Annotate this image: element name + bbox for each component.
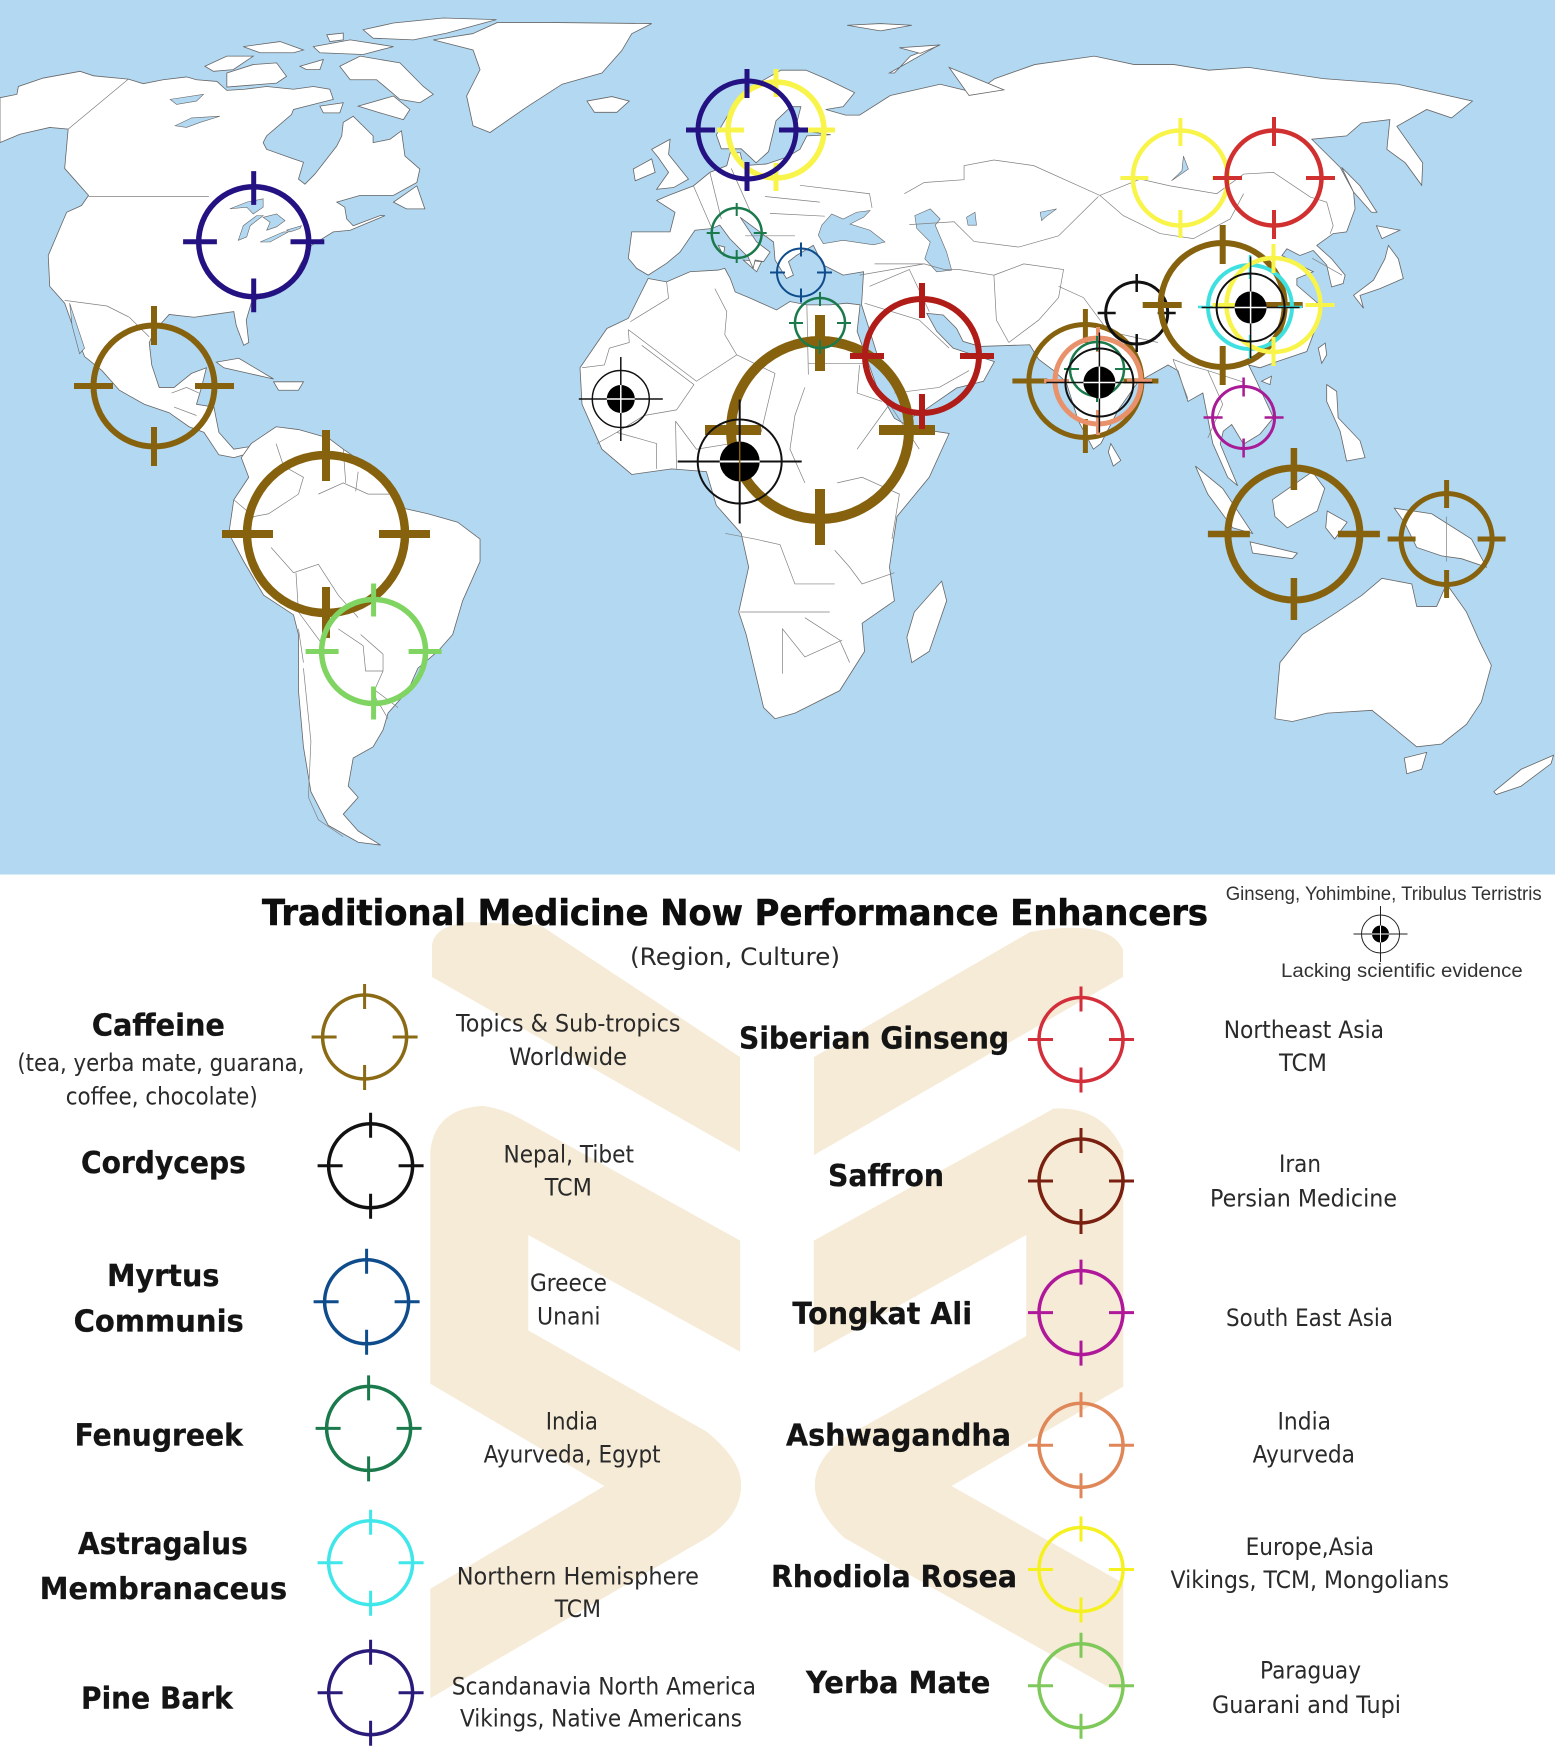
legend row: Yerba Mate: Paraguay	[1260, 1657, 1361, 1685]
legend row: Rhodiola Rosea: Vikings, TCM, Mongolians	[1170, 1566, 1449, 1594]
legend row: Ashwagandha: India	[1278, 1408, 1331, 1436]
reticle: Siberian Ginseng	[1213, 117, 1335, 239]
reticle: lacking evidence, Nigeria	[678, 400, 802, 524]
legend row: Astragalus Membranaceus: Membranaceus	[40, 1572, 287, 1607]
reticle: Yerba Mate, Paraguay	[306, 584, 442, 720]
legend row: Myrtus Communis: Myrtus	[107, 1259, 219, 1294]
legend row: Fenugreek: Fenugreek	[75, 1418, 244, 1453]
reticle: Caffeine, India	[1012, 309, 1158, 453]
legend row: Astragalus Membranaceus	[40, 1510, 699, 1623]
legend row: Tongkat Ali: South East Asia	[1226, 1304, 1393, 1332]
legend row: Cordyceps: TCM	[544, 1174, 592, 1202]
reticle: Fenugreek, Egypt	[789, 292, 851, 354]
legend row: Tongkat Ali: Tongkat Ali	[792, 1297, 972, 1332]
legend row: Ashwagandha	[786, 1392, 1355, 1498]
legend row: Caffeine: Caffeine	[92, 1008, 225, 1043]
reticle: Tongkat Ali, South East Asia	[1204, 378, 1284, 458]
legend row: Myrtus Communis: Communis	[74, 1305, 244, 1340]
legend row: Saffron: Saffron	[828, 1159, 944, 1194]
reticle: Caffeine, Central Africa	[705, 315, 935, 545]
legend row: Myrtus Communis: Greece	[530, 1269, 607, 1297]
legend row: Yerba Mate: Guarani and Tupi	[1212, 1691, 1401, 1719]
reticle: Caffeine, Indonesia	[1208, 448, 1380, 620]
key: lacking scientific evidence: Ginseng, Yohimbine, Tribulus Terristris	[1226, 884, 1542, 905]
reticle: Pine Bark, North America	[183, 171, 324, 312]
legend row: Myrtus Communis	[74, 1249, 607, 1355]
legend row: Rhodiola Rosea: Europe,Asia	[1246, 1533, 1374, 1561]
key: lacking scientific evidence: Lacking scientific evidence	[1281, 961, 1523, 982]
reticle: lacking evidence, India	[1046, 332, 1152, 432]
legend row: Astragalus Membranaceus: TCM	[554, 1595, 601, 1623]
reticle: Rhodiola Rosea, Siberia	[1120, 118, 1240, 238]
legend row: Caffeine: Worldwide	[509, 1043, 627, 1071]
reticle: Caffeine, New Guinea	[1388, 480, 1506, 598]
land masses	[0, 18, 1554, 845]
legend row: Saffron: Iran	[1279, 1150, 1321, 1178]
legend row: Rhodiola Rosea	[771, 1516, 1449, 1622]
legend row: Pine Bark: Pine Bark	[81, 1682, 234, 1717]
reticle: Myrtus Communis, Greece	[770, 242, 832, 302]
legend row: Siberian Ginseng: Northeast Asia	[1224, 1016, 1384, 1044]
legend row: Fenugreek: Ayurveda, Egypt	[484, 1440, 661, 1468]
reticle: lacking evidence, China	[1202, 256, 1300, 358]
reticle: Fenugreek, India	[1064, 336, 1130, 402]
reticle: Cordyceps, Nepal and Tibet	[1098, 274, 1176, 352]
legend row: Saffron	[828, 1128, 1397, 1234]
subtitle: (Region, Culture)	[630, 943, 840, 971]
reticle: Rhodiola Rosea, China	[1212, 244, 1334, 366]
legend row: Siberian Ginseng: TCM	[1278, 1049, 1327, 1077]
legend row: Siberian Ginseng	[739, 986, 1384, 1092]
legend row: Myrtus Communis: Unani	[537, 1302, 600, 1330]
reticle: Fenugreek, Italy	[707, 203, 767, 263]
legend row: Astragalus Membranaceus: Astragalus	[78, 1527, 248, 1562]
watermark logo	[430, 922, 1123, 1698]
panel: world map	[0, 0, 1555, 874]
legend row: Yerba Mate	[805, 1633, 1401, 1739]
reticle: Astragalus, China	[1198, 255, 1302, 359]
water bodies	[70, 94, 1188, 354]
reticle: Ashwagandha, India	[1044, 327, 1152, 435]
legend row: Caffeine: Topics & Sub-tropics	[455, 1010, 680, 1038]
legend row: Cordyceps	[81, 1113, 634, 1219]
title: Traditional Medicine Now Performance Enhancers	[262, 893, 1208, 934]
legend row: Caffeine: coffee, chocolate)	[66, 1082, 258, 1110]
legend row: Yerba Mate: Yerba Mate	[805, 1666, 990, 1701]
legend row: Pine Bark: Scandanavia North America	[452, 1673, 756, 1701]
reticle: Caffeine, Amazon	[222, 430, 430, 638]
legend row: Siberian Ginseng: Siberian Ginseng	[739, 1021, 1009, 1056]
reticle: Saffron, Iran	[850, 283, 994, 429]
country borders	[65, 79, 1447, 837]
reticle: Caffeine, Mexico	[74, 306, 234, 466]
reticle: Caffeine, China	[1143, 225, 1303, 385]
legend row: Saffron: Persian Medicine	[1210, 1184, 1397, 1212]
legend row: Pine Bark: Vikings, Native Americans	[460, 1705, 742, 1733]
legend row: Astragalus Membranaceus: Northern Hemisphere	[457, 1562, 699, 1590]
legend row: Cordyceps: Cordyceps	[81, 1146, 246, 1181]
legend row: Ashwagandha: Ashwagandha	[786, 1418, 1011, 1453]
legend row: Fenugreek: India	[546, 1408, 598, 1436]
reticle: Pine Bark, Scandinavia	[686, 69, 808, 191]
legend row: Pine Bark	[81, 1640, 756, 1746]
reticle: lacking evidence, West Africa	[579, 357, 663, 441]
reticle: Rhodiola Rosea, Scandinavia	[717, 69, 835, 191]
legend row: Caffeine	[17, 984, 680, 1110]
legend row: Ashwagandha: Ayurveda	[1253, 1440, 1355, 1468]
legend row: Fenugreek	[75, 1375, 661, 1481]
legend row: Caffeine: (tea, yerba mate, guarana,	[17, 1049, 304, 1077]
legend row: Cordyceps: Nepal, Tibet	[504, 1140, 634, 1168]
legend row: Rhodiola Rosea: Rhodiola Rosea	[771, 1560, 1017, 1595]
legend row: Tongkat Ali	[792, 1260, 1393, 1366]
key: lacking scientific evidence	[1226, 884, 1542, 982]
